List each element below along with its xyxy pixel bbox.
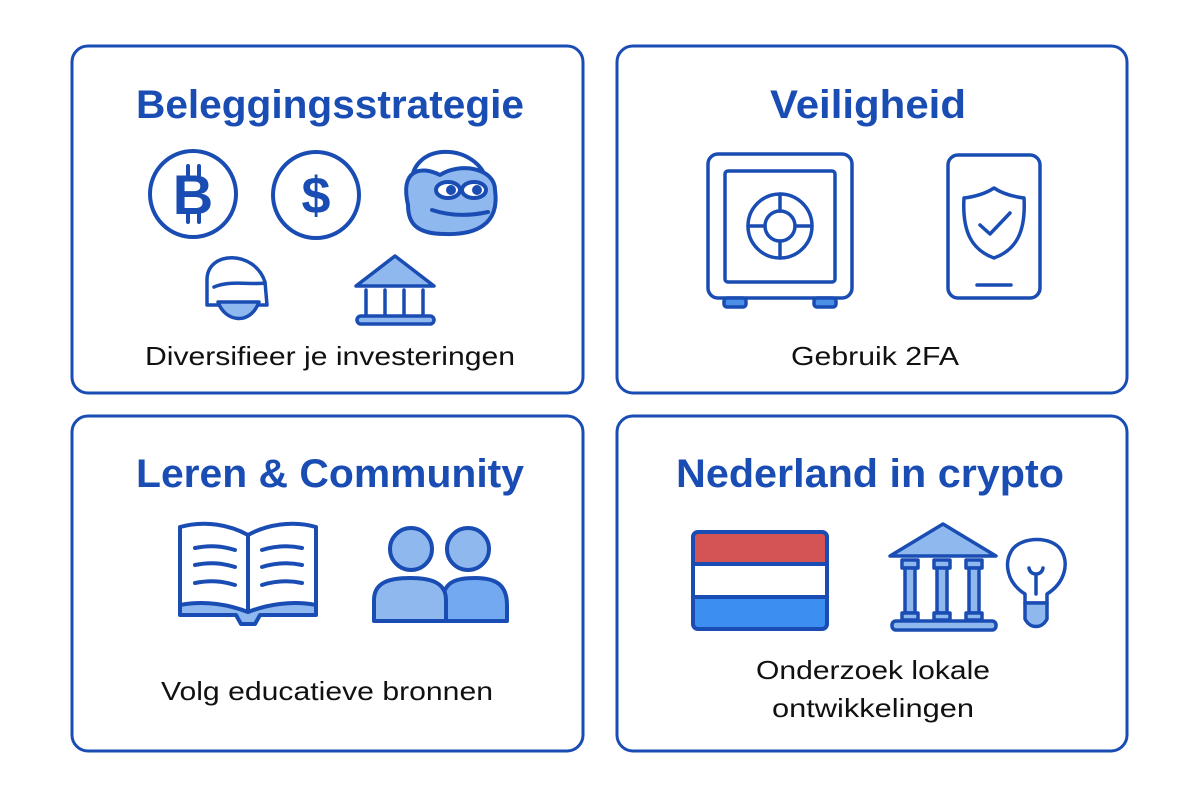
caption: Onderzoek lokale <box>756 655 990 685</box>
icon: bitcoin <box>150 151 236 237</box>
icon: dutch flag <box>693 532 827 629</box>
icon: bank <box>356 256 434 324</box>
title: Veiligheid: Veiligheid <box>770 83 966 127</box>
icon: lightbulb <box>1008 540 1065 626</box>
icon: dollar: $ <box>302 167 331 225</box>
caption: Diversifieer je investeringen <box>145 341 515 371</box>
icon: safe <box>708 154 852 307</box>
caption: Gebruik 2FA <box>791 341 960 371</box>
icon: dollar <box>273 152 359 238</box>
icon: people <box>374 528 507 621</box>
panel: leren & community <box>72 416 583 751</box>
panel: nederland in crypto <box>617 416 1127 751</box>
caption: Volg educatieve bronnen <box>161 676 493 706</box>
icon: bitcoin: B <box>173 163 213 226</box>
icon: book <box>180 524 316 624</box>
icon: helmet <box>207 258 267 319</box>
title: Nederland in crypto: Nederland in crypto <box>676 452 1064 496</box>
panel: nederland in crypto: ontwikkelingen <box>772 693 974 723</box>
panel: beleggingsstrategie <box>72 46 583 393</box>
icon: bank columns <box>890 524 996 630</box>
title: Leren & Community: Leren & Community <box>136 452 525 496</box>
icon: frog <box>406 152 496 234</box>
panel: veiligheid <box>617 46 1127 393</box>
icon: phone shield <box>948 155 1040 298</box>
title: Beleggingsstrategie: Beleggingsstrategie <box>136 83 524 127</box>
